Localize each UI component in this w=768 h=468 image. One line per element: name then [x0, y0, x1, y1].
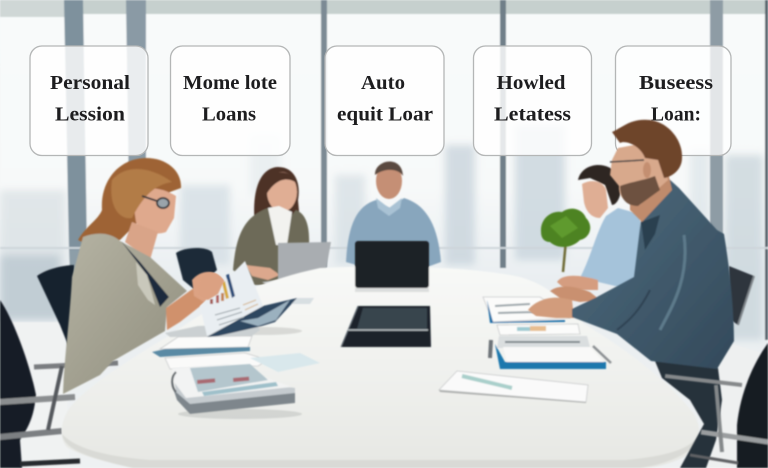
label: Howled Letatess: Howled — [496, 72, 566, 94]
potted green plant — [541, 209, 590, 272]
label: Buseess Loan: — [616, 46, 731, 156]
woman presenting, beige blazer — [63, 158, 224, 394]
label: Mome lote Loans: Loans — [202, 104, 256, 126]
bars — [210, 274, 235, 304]
chair: near left — [0, 300, 36, 468]
trousers — [655, 361, 722, 468]
table with dark laptop back — [62, 241, 700, 468]
shirt — [572, 178, 734, 369]
chart page — [200, 261, 263, 336]
armrests left — [34, 363, 118, 367]
chart text lines — [215, 300, 258, 325]
hair back — [78, 158, 181, 244]
label: Howled Letatess: Letatess — [494, 104, 571, 126]
tablet on table — [341, 306, 431, 347]
label: Auto equit Loar: equit Loar — [337, 104, 433, 126]
five floating loan labels — [30, 46, 731, 156]
glasses — [142, 196, 169, 208]
label: Auto equit Loar — [325, 46, 444, 156]
label: Howled Letatess — [474, 46, 592, 156]
hand — [192, 272, 224, 302]
ear — [643, 162, 651, 178]
label: Mome lote Loans — [170, 46, 290, 156]
window frames — [0, 0, 768, 340]
front hands — [528, 298, 574, 318]
face and beard — [610, 140, 668, 205]
label: Buseess Loan:: Buseess — [639, 72, 713, 94]
far woman in olive blazer — [233, 167, 309, 285]
neck — [125, 222, 158, 260]
neck — [630, 172, 672, 222]
right woman in light blue shirt — [557, 165, 645, 290]
rear hand — [550, 287, 600, 302]
open folder — [207, 298, 297, 337]
laptop — [262, 242, 331, 287]
hair — [612, 120, 682, 178]
papers and presented bar chart document — [152, 261, 320, 372]
label: Personal Lession: Lession — [55, 104, 126, 126]
label: Personal Lession: Personal — [50, 72, 130, 94]
right side binders and papers — [439, 297, 611, 403]
chair: middle left — [37, 265, 76, 380]
far man in blue shirt — [346, 162, 441, 266]
face — [132, 188, 176, 234]
hazy city skyline — [0, 125, 763, 340]
chairs behind the table — [0, 248, 754, 468]
ring binder with report — [172, 364, 302, 419]
dark top — [121, 241, 169, 307]
label: Mome lote Loans: Mome lote — [183, 72, 277, 94]
hand in front of document — [198, 273, 224, 300]
forearm — [166, 285, 208, 330]
floor — [0, 322, 70, 468]
chair: far left — [176, 248, 217, 290]
near right chair with armrest — [665, 343, 768, 468]
near man in dark denim shirt — [528, 120, 734, 468]
table top — [62, 266, 699, 468]
label: Buseess Loan:: Loan: — [651, 104, 701, 126]
jacket — [63, 234, 187, 394]
chair: right rear — [728, 266, 754, 325]
label: Auto equit Loar: Auto — [361, 72, 405, 94]
glasses — [610, 160, 644, 162]
label: Personal Lession — [30, 46, 148, 156]
